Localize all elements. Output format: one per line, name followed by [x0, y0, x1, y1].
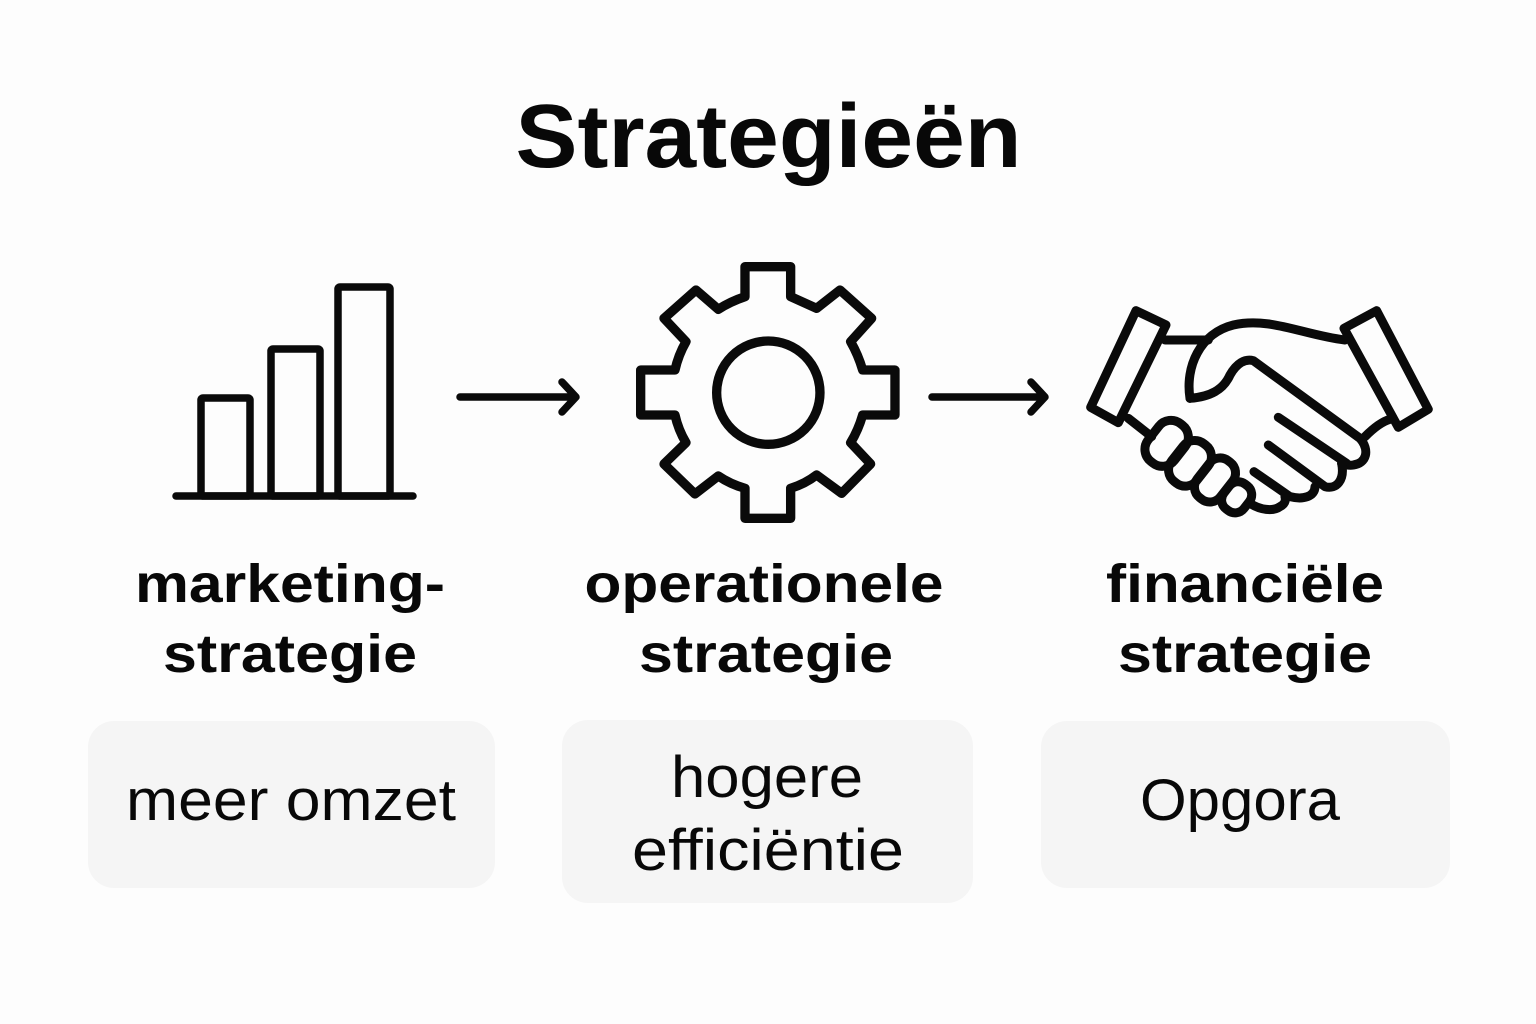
- panel: Opgora: Opgora: [1140, 768, 1341, 833]
- heading: marketing strategy: marketing-: [135, 554, 445, 614]
- heading: operational strategy: operationele: [584, 554, 944, 614]
- icon: handshake: [1091, 311, 1428, 517]
- panel: more revenue: meer omzet: [126, 768, 456, 833]
- panel: Opgora: [1041, 721, 1450, 888]
- panel: higher efficiency: hogere: [671, 745, 863, 810]
- heading: marketing strategy: strategie: [163, 624, 417, 684]
- panel: more revenue: [88, 721, 495, 888]
- panel: higher efficiency: efficiëntie: [632, 818, 904, 883]
- heading: financial strategy: financiële: [1106, 554, 1384, 614]
- title: Strategieën: [516, 87, 1022, 187]
- heading: operational strategy: [584, 554, 944, 684]
- heading: operational strategy: strategie: [639, 624, 893, 684]
- heading: financial strategy: [1106, 554, 1384, 684]
- heading: marketing strategy: [135, 554, 445, 684]
- arrow: operations to finance: [932, 382, 1045, 412]
- icon: gear: [641, 267, 895, 518]
- panel: higher efficiency: [562, 720, 973, 903]
- arrow: marketing to operations: [460, 382, 576, 412]
- icon: bar chart: [176, 287, 413, 496]
- heading: financial strategy: strategie: [1118, 624, 1372, 684]
